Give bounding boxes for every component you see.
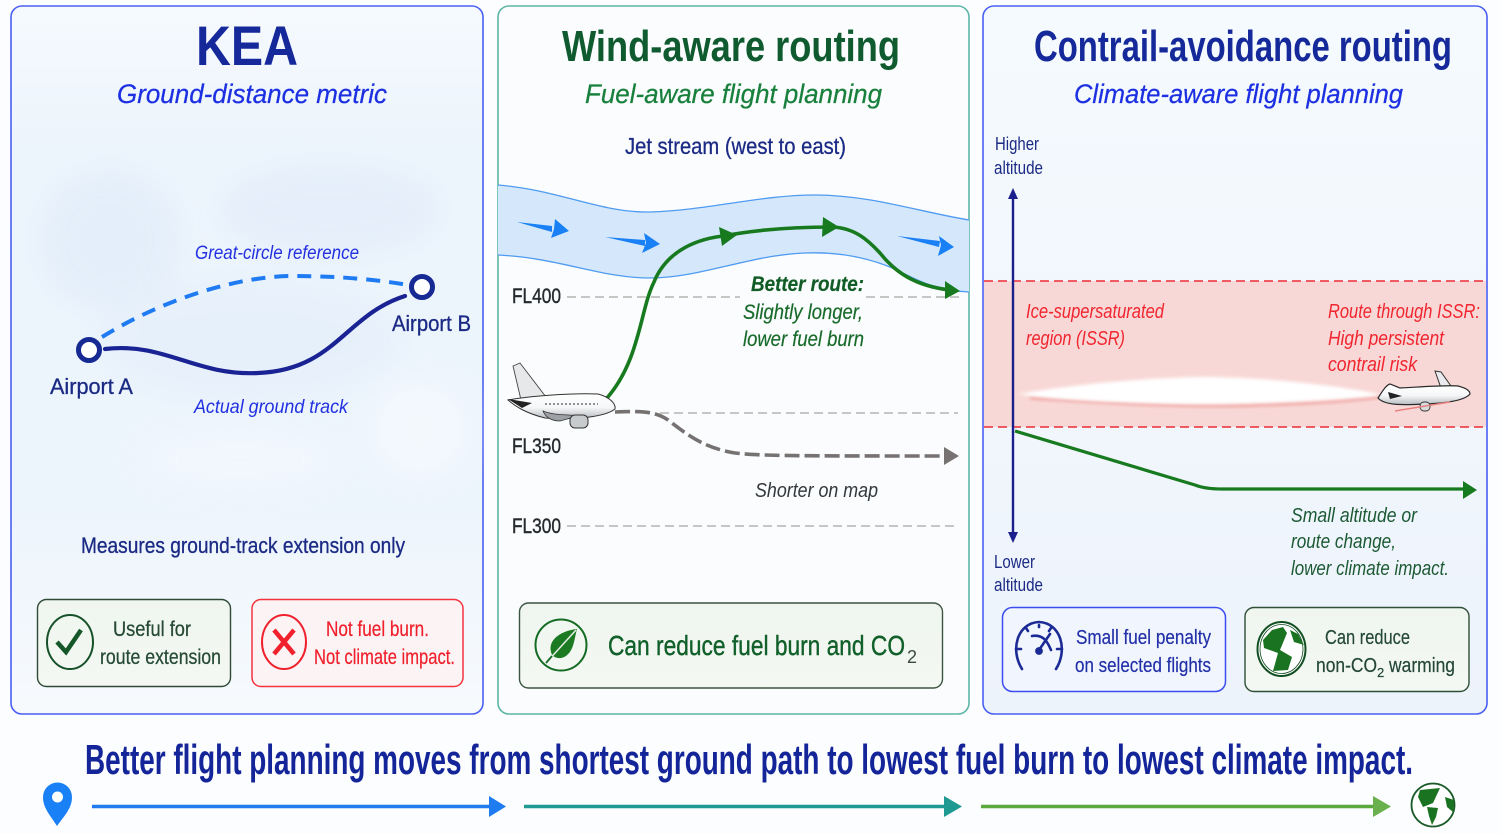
callout text: 2: [907, 647, 917, 667]
label: route through ISSR: [1328, 301, 1480, 376]
label: FL350: FL350: [512, 435, 561, 458]
callout text: [314, 618, 455, 669]
callout text: non-CO: [1316, 654, 1377, 677]
label: great-circle: Great-circle reference: [195, 243, 359, 264]
annotation: better route: [743, 273, 864, 351]
arrow: shortest ground path: [92, 796, 506, 817]
label: higher altitude: altitude: [994, 158, 1043, 178]
label: ISSR: Ice-supersaturated: [1026, 301, 1165, 323]
label: small altitude change: [1291, 505, 1449, 580]
callout: not fuel burn: [252, 600, 463, 686]
callout text: Can reduce: [1325, 626, 1410, 649]
callout: reduce non-CO2 warming: [1245, 608, 1469, 692]
callout text: route extension: [100, 646, 221, 669]
icon: globe: [1258, 622, 1306, 676]
heading: wind-aware routing: Wind-aware routing: [562, 22, 900, 71]
callout: can reduce fuel burn and CO2: [520, 603, 942, 688]
callout text: [1075, 626, 1212, 677]
label: route through ISSR: contrail risk: [1328, 354, 1418, 376]
label: airport A: Airport A: [50, 374, 133, 399]
caption: ground-track only: Measures ground-track extension only: [81, 533, 405, 558]
callout: small fuel penalty: [1002, 608, 1226, 692]
annotation: shorter on map: Shorter on map: [755, 480, 878, 502]
plane climbing: [508, 363, 615, 428]
label: airport B: Airport B: [392, 311, 471, 336]
label: lower altitude: [994, 552, 1043, 595]
heading: KEA: KEA: [196, 14, 298, 77]
label: higher altitude: [994, 134, 1043, 178]
label: lower altitude: altitude: [994, 575, 1043, 595]
label: ISSR: [1026, 301, 1165, 350]
panel: contrail-avoidance routing: [983, 6, 1487, 714]
wind arrow 2: [605, 233, 660, 253]
callout text: [100, 618, 221, 669]
icon: globe: [1412, 784, 1454, 826]
icon: cross: [262, 615, 306, 669]
label: FL400: FL400: [512, 285, 561, 308]
callout text: [1316, 626, 1455, 680]
callout text: 2: [1377, 665, 1384, 680]
subheading: climate-aware: Climate-aware flight planning: [1074, 79, 1403, 109]
wind arrow 3: [897, 236, 954, 256]
flight level dashes: [567, 297, 960, 526]
callout text: warming: [1388, 654, 1455, 677]
green better route: [607, 217, 960, 398]
plane in ISSR: [1378, 371, 1470, 411]
callout text: Useful for: [113, 618, 191, 641]
jet stream band: [498, 185, 969, 292]
annotation: better route: Slightly longer,: [743, 301, 863, 324]
icon: leaf: [536, 620, 586, 670]
label: ISSR: region (ISSR): [1026, 328, 1125, 350]
label: small altitude change: route change,: [1291, 531, 1396, 553]
panel: wind-aware routing: [498, 6, 969, 714]
panel: KEA: [11, 6, 483, 714]
icon: location pin: [43, 783, 72, 826]
callout text: on selected flights: [1075, 654, 1211, 677]
label: small altitude change: Small altitude or: [1291, 505, 1418, 527]
icon: check mark: [47, 615, 93, 669]
annotation: better route: lower fuel burn: [743, 328, 864, 351]
green avoidance route: [1015, 431, 1477, 499]
altitude axis: [1008, 188, 1018, 543]
callout: useful for route extension: [38, 600, 230, 686]
callout text: Not climate impact.: [314, 646, 455, 669]
ISSR band: [984, 281, 1486, 427]
callout text: Small fuel penalty: [1076, 626, 1212, 649]
label: jet stream: Jet stream (west to east): [625, 133, 846, 159]
callout text: Not fuel burn.: [326, 618, 429, 641]
icon: gauge: [1016, 622, 1062, 669]
label: higher altitude: Higher: [995, 134, 1039, 154]
subheading: fuel-aware: Fuel-aware flight planning: [585, 79, 882, 109]
airport B marker: [412, 276, 432, 298]
subheading: ground-distance metric: Ground-distance metric: [117, 79, 387, 109]
route: actual ground track: [105, 296, 405, 373]
arrow: lowest fuel burn: [524, 796, 962, 817]
airport A marker: [78, 340, 100, 360]
cloud texture: [40, 165, 470, 490]
label: actual track: Actual ground track: [193, 397, 349, 418]
label: lower altitude: Lower: [994, 552, 1035, 572]
contrail: [1018, 377, 1385, 406]
arrow: lowest climate impact: [981, 796, 1391, 817]
annotation: better route: Better route:: [751, 273, 864, 296]
grey shorter route: [615, 412, 959, 465]
wind arrow 1: [517, 219, 569, 238]
callout text: Can reduce fuel burn and CO: [608, 630, 905, 661]
label: route through ISSR: High persistent: [1328, 328, 1445, 350]
label: FL300: FL300: [512, 515, 561, 538]
route: great-circle reference: [102, 276, 408, 337]
label: small altitude change: lower climate impact.: [1291, 558, 1449, 580]
